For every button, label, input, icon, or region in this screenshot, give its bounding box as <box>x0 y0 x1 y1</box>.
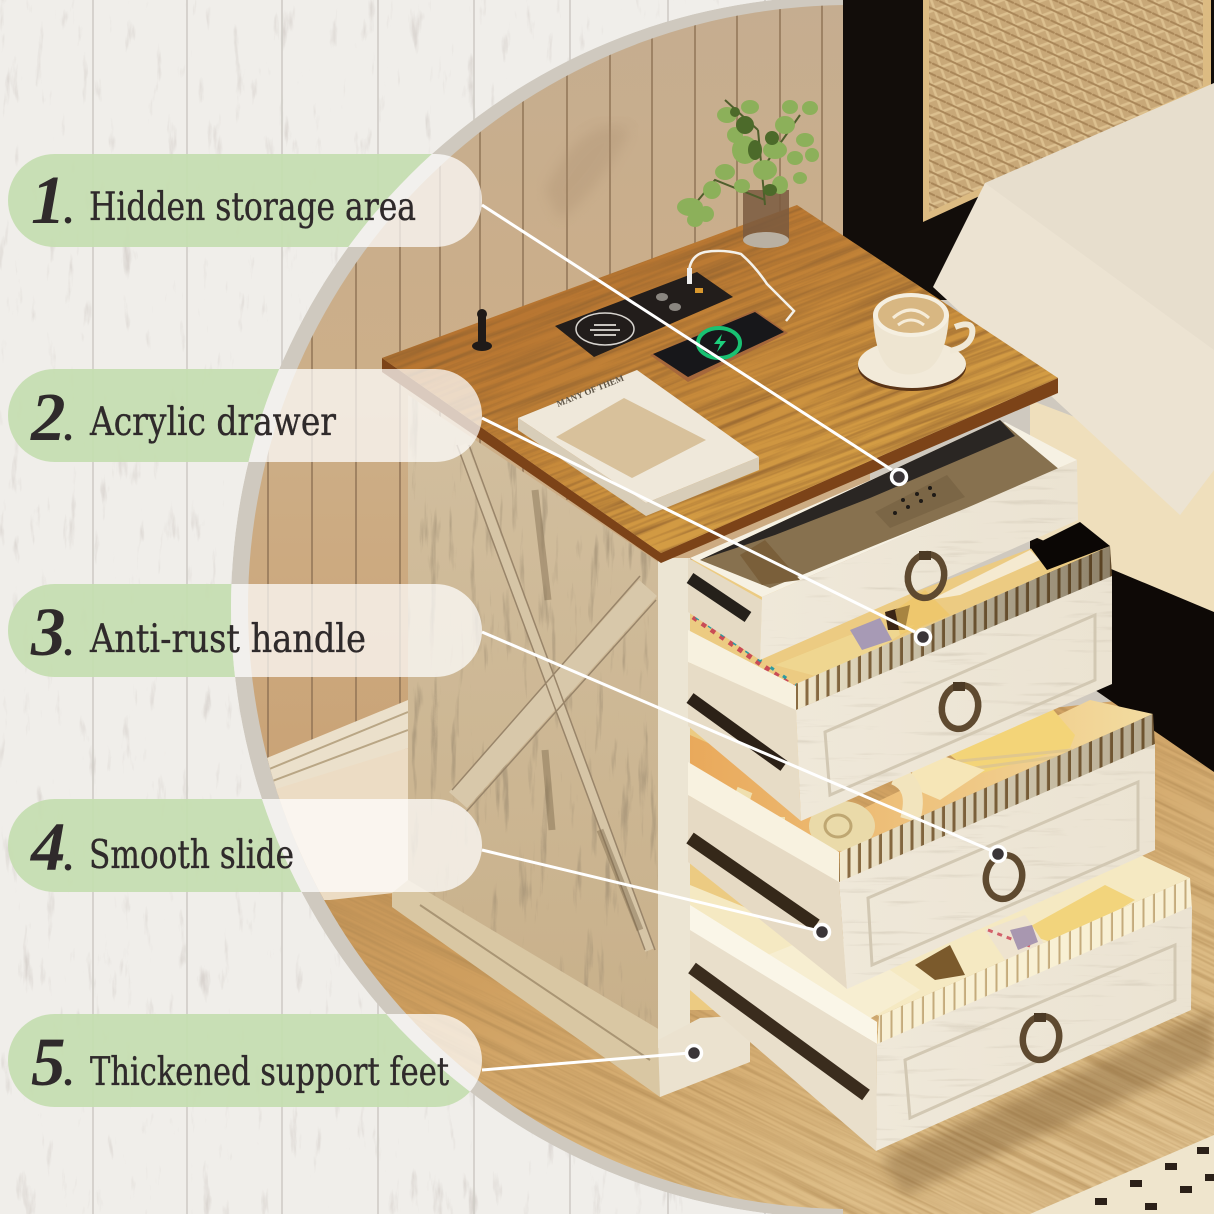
drawer 2 contents <box>693 550 1040 688</box>
baseboard <box>267 700 408 900</box>
drawer 2 <box>688 545 1112 821</box>
handle <box>904 551 948 601</box>
background: whitewashed planks <box>0 0 850 1214</box>
vase <box>743 190 789 248</box>
label 4: Smooth slide: . <box>63 834 73 879</box>
label 3: Anti-rust handle: . <box>63 619 73 664</box>
rug marks <box>1095 1147 1214 1210</box>
front post and foot <box>658 558 800 1097</box>
label 2: Acrylic drawer: Acrylic drawer <box>89 400 336 445</box>
label 3: Anti-rust handle: 3 <box>30 594 66 670</box>
marker 5 <box>686 1046 702 1060</box>
tabletop <box>265 14 1135 746</box>
label 2: Acrylic drawer: . <box>63 404 73 449</box>
label 4: Smooth slide: 4 <box>29 809 66 885</box>
phone <box>650 310 788 382</box>
marker 4 <box>814 924 830 940</box>
drawer 3 <box>688 700 1155 989</box>
leader line 5 <box>482 1053 690 1070</box>
label 5: Thickened support feet: Thickened support feet <box>90 1050 449 1095</box>
under-bed block behind drawer 1 <box>1030 522 1110 570</box>
bed frame and black underside <box>843 0 1214 772</box>
wireless charging panel <box>555 251 794 357</box>
label 4: Smooth slide: Smooth slide <box>89 833 294 878</box>
handle <box>1019 1013 1063 1063</box>
book <box>518 370 759 516</box>
handle <box>938 682 982 732</box>
bedding <box>933 83 1214 612</box>
book: MANY OF THEM <box>555 373 626 409</box>
marker 1 <box>892 470 906 484</box>
label 5: Thickened support feet <box>8 1014 482 1107</box>
label 2: Acrylic drawer <box>8 369 482 462</box>
leader line 4 <box>482 850 815 930</box>
drawer 4 <box>690 850 1192 1151</box>
cabinet side <box>408 395 658 1045</box>
drawer 4 contents <box>770 885 1135 1018</box>
drawer 3 contents: books and headphones <box>742 706 1075 851</box>
leader line 3 <box>482 632 990 850</box>
marker 3 <box>990 846 1006 862</box>
label 1: Hidden storage area: Hidden storage area <box>89 185 416 230</box>
drawer 1 <box>688 420 1078 660</box>
floor <box>320 702 1214 1214</box>
plant <box>677 100 819 227</box>
label 1: Hidden storage area: . <box>63 187 73 232</box>
handle <box>982 852 1026 902</box>
drawer 1 contents: pistol and magazine <box>740 475 965 585</box>
marker 2 <box>916 630 930 644</box>
circle ring <box>231 0 1112 1214</box>
label 1: Hidden storage area <box>8 154 482 247</box>
label 1: Hidden storage area: 1 <box>31 162 66 238</box>
plinth <box>392 880 660 1097</box>
wall <box>230 0 870 900</box>
rattan headboard <box>923 0 1211 222</box>
chess piece <box>472 309 492 351</box>
leader lines and markers <box>482 205 1006 1070</box>
label 5: Thickened support feet: 5 <box>31 1024 66 1100</box>
label 3: Anti-rust handle: Anti-rust handle <box>89 617 366 662</box>
saucer and coffee cup <box>858 293 972 391</box>
leader line 1 <box>482 205 892 470</box>
label 3: Anti-rust handle <box>8 584 482 677</box>
label 4: Smooth slide <box>8 799 482 892</box>
leader line 2 <box>482 418 915 632</box>
label 5: Thickened support feet: . <box>63 1049 73 1094</box>
label 2: Acrylic drawer: 2 <box>30 379 66 455</box>
